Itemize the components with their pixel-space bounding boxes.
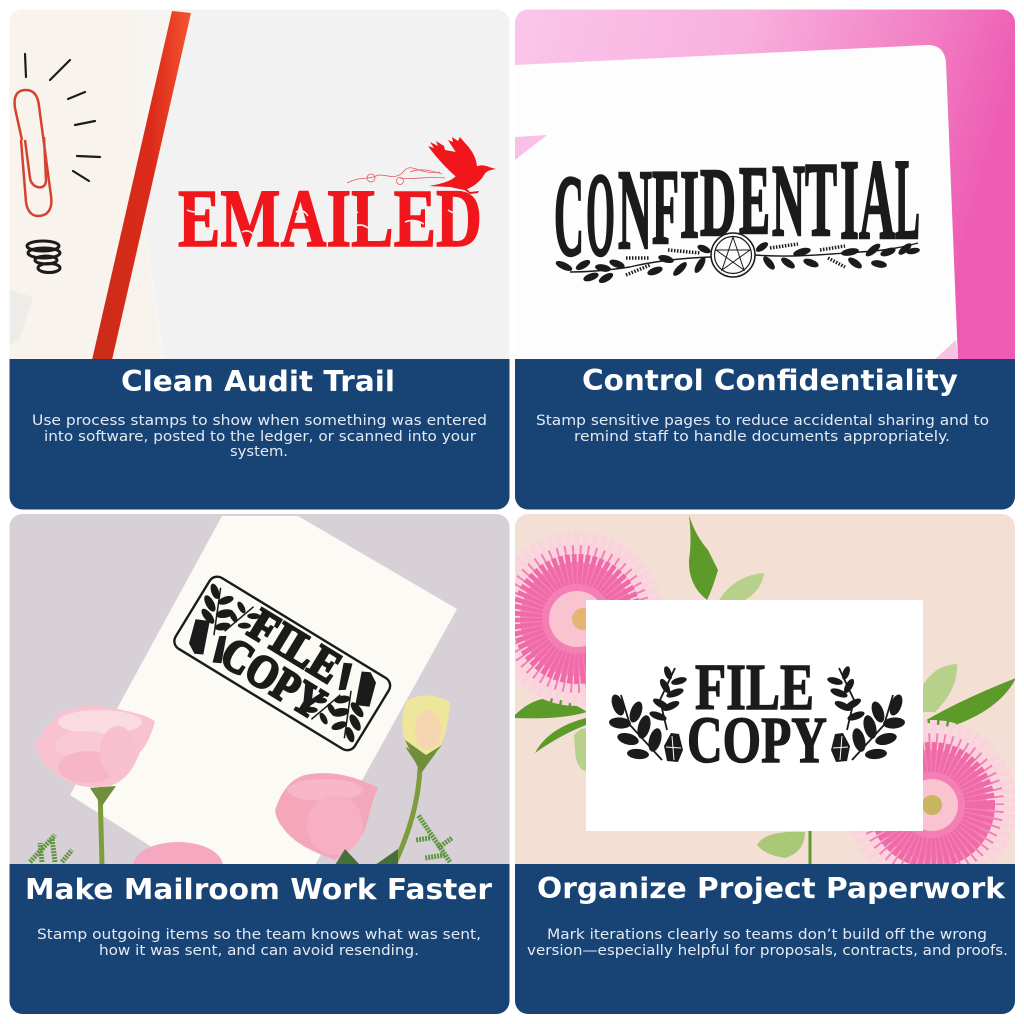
caption panel — [515, 359, 1015, 510]
panel: organize project paperwork — [503, 514, 1016, 1015]
panel: make mailroom work faster — [9, 514, 510, 1015]
icon: pink gerbera bottom right — [860, 733, 1004, 877]
panel: control confidentiality — [515, 9, 1016, 510]
icon: sketched light bulb — [25, 54, 100, 272]
stamp: CONFIDENTIAL: A — [859, 136, 895, 263]
icon: paperclip — [15, 90, 51, 216]
stamp: CONFIDENTIAL: N — [772, 144, 805, 258]
illustration: leaves and buds — [515, 515, 1016, 865]
stamp: CONFIDENTIAL: F — [652, 149, 679, 267]
body text: version—especially helpful for proposals, contracts, and proofs. — [527, 943, 1008, 959]
stamp: CONFIDENTIAL: I — [840, 136, 859, 263]
panel: control confidentiality: L — [895, 136, 920, 263]
icon: leaves and crystals left — [174, 580, 265, 674]
body text: Use process stamps to show when something was entered — [32, 413, 487, 429]
body text: how it was sent, and can avoid resending. — [99, 943, 419, 959]
caption panel — [10, 864, 510, 1015]
stamp: CONFIDENTIAL: N — [618, 146, 652, 273]
icon: red pencil — [92, 11, 191, 360]
photo: white card on pink watercolor — [515, 9, 1016, 360]
photo: desk with pencil and paperclip — [9, 9, 510, 360]
icon: yellow bud — [402, 695, 450, 772]
stamp: EMAILED: EMAILED — [178, 172, 482, 264]
stamp: CONFIDENTIAL: C — [554, 152, 584, 281]
icon: laurel right — [826, 665, 905, 762]
stamp: FILE COPY with laurels: FILE — [695, 651, 814, 724]
body text: Stamp sensitive pages to reduce accidental sharing and to — [536, 413, 989, 429]
stamp: FILE COPY tilted: FILE — [240, 598, 351, 693]
stamp: CONFIDENTIAL: T — [805, 141, 837, 258]
icon: pink rose right — [275, 773, 378, 860]
body text: system. — [230, 444, 288, 460]
icon: pink rose bottom — [133, 842, 223, 864]
body text: into software, posted to the ledger, or scanned into your — [44, 429, 476, 445]
stamp: FILE COPY with laurels: COPY — [687, 704, 827, 777]
body text: Stamp outgoing items so the team knows what was sent, — [37, 927, 481, 943]
heading: Clean Audit Trail — [121, 365, 395, 398]
body text: Mark iterations clearly so teams don’t build off the wrong — [547, 927, 987, 943]
ornament: vine and pentacle — [554, 233, 920, 285]
icon: raven — [428, 137, 496, 194]
caption panel — [515, 864, 1015, 1015]
stamp: CONFIDENTIAL: I — [680, 151, 699, 259]
icon: pink gerbera top left — [503, 545, 651, 693]
icon: leaves and crystals right — [306, 662, 376, 742]
body text — [32, 413, 487, 460]
icon: pink rose left — [35, 706, 155, 787]
body text — [527, 927, 1008, 959]
stamp: CONFIDENTIAL: E — [739, 147, 770, 255]
stamp: CONFIDENTIAL: O — [586, 148, 615, 281]
photo: tilted card background — [9, 514, 510, 865]
stamp: FILE COPY with laurels — [609, 665, 905, 764]
heading: Control Confidentiality — [582, 364, 958, 397]
illustration: roses and greenery — [28, 696, 454, 864]
stamp: EMAILED — [178, 137, 496, 247]
stamp: CONFIDENTIAL: D — [700, 149, 736, 257]
body text: remind staff to handle documents appropriately. — [574, 429, 950, 445]
white card — [586, 600, 923, 831]
photo: peach background — [515, 514, 1016, 865]
heading: Make Mailroom Work Faster — [25, 873, 492, 906]
stamp: FILE COPY tilted: COPY — [212, 627, 334, 729]
panel: clean audit trail — [9, 9, 510, 510]
stamp: CONFIDENTIAL — [556, 161, 919, 258]
caption panel — [10, 359, 510, 510]
heading: Organize Project Paperwork — [537, 872, 1006, 905]
body text — [536, 413, 989, 445]
body text — [37, 927, 481, 959]
stamp: FILE COPY tilted — [170, 568, 397, 754]
icon: laurel left — [609, 665, 688, 762]
